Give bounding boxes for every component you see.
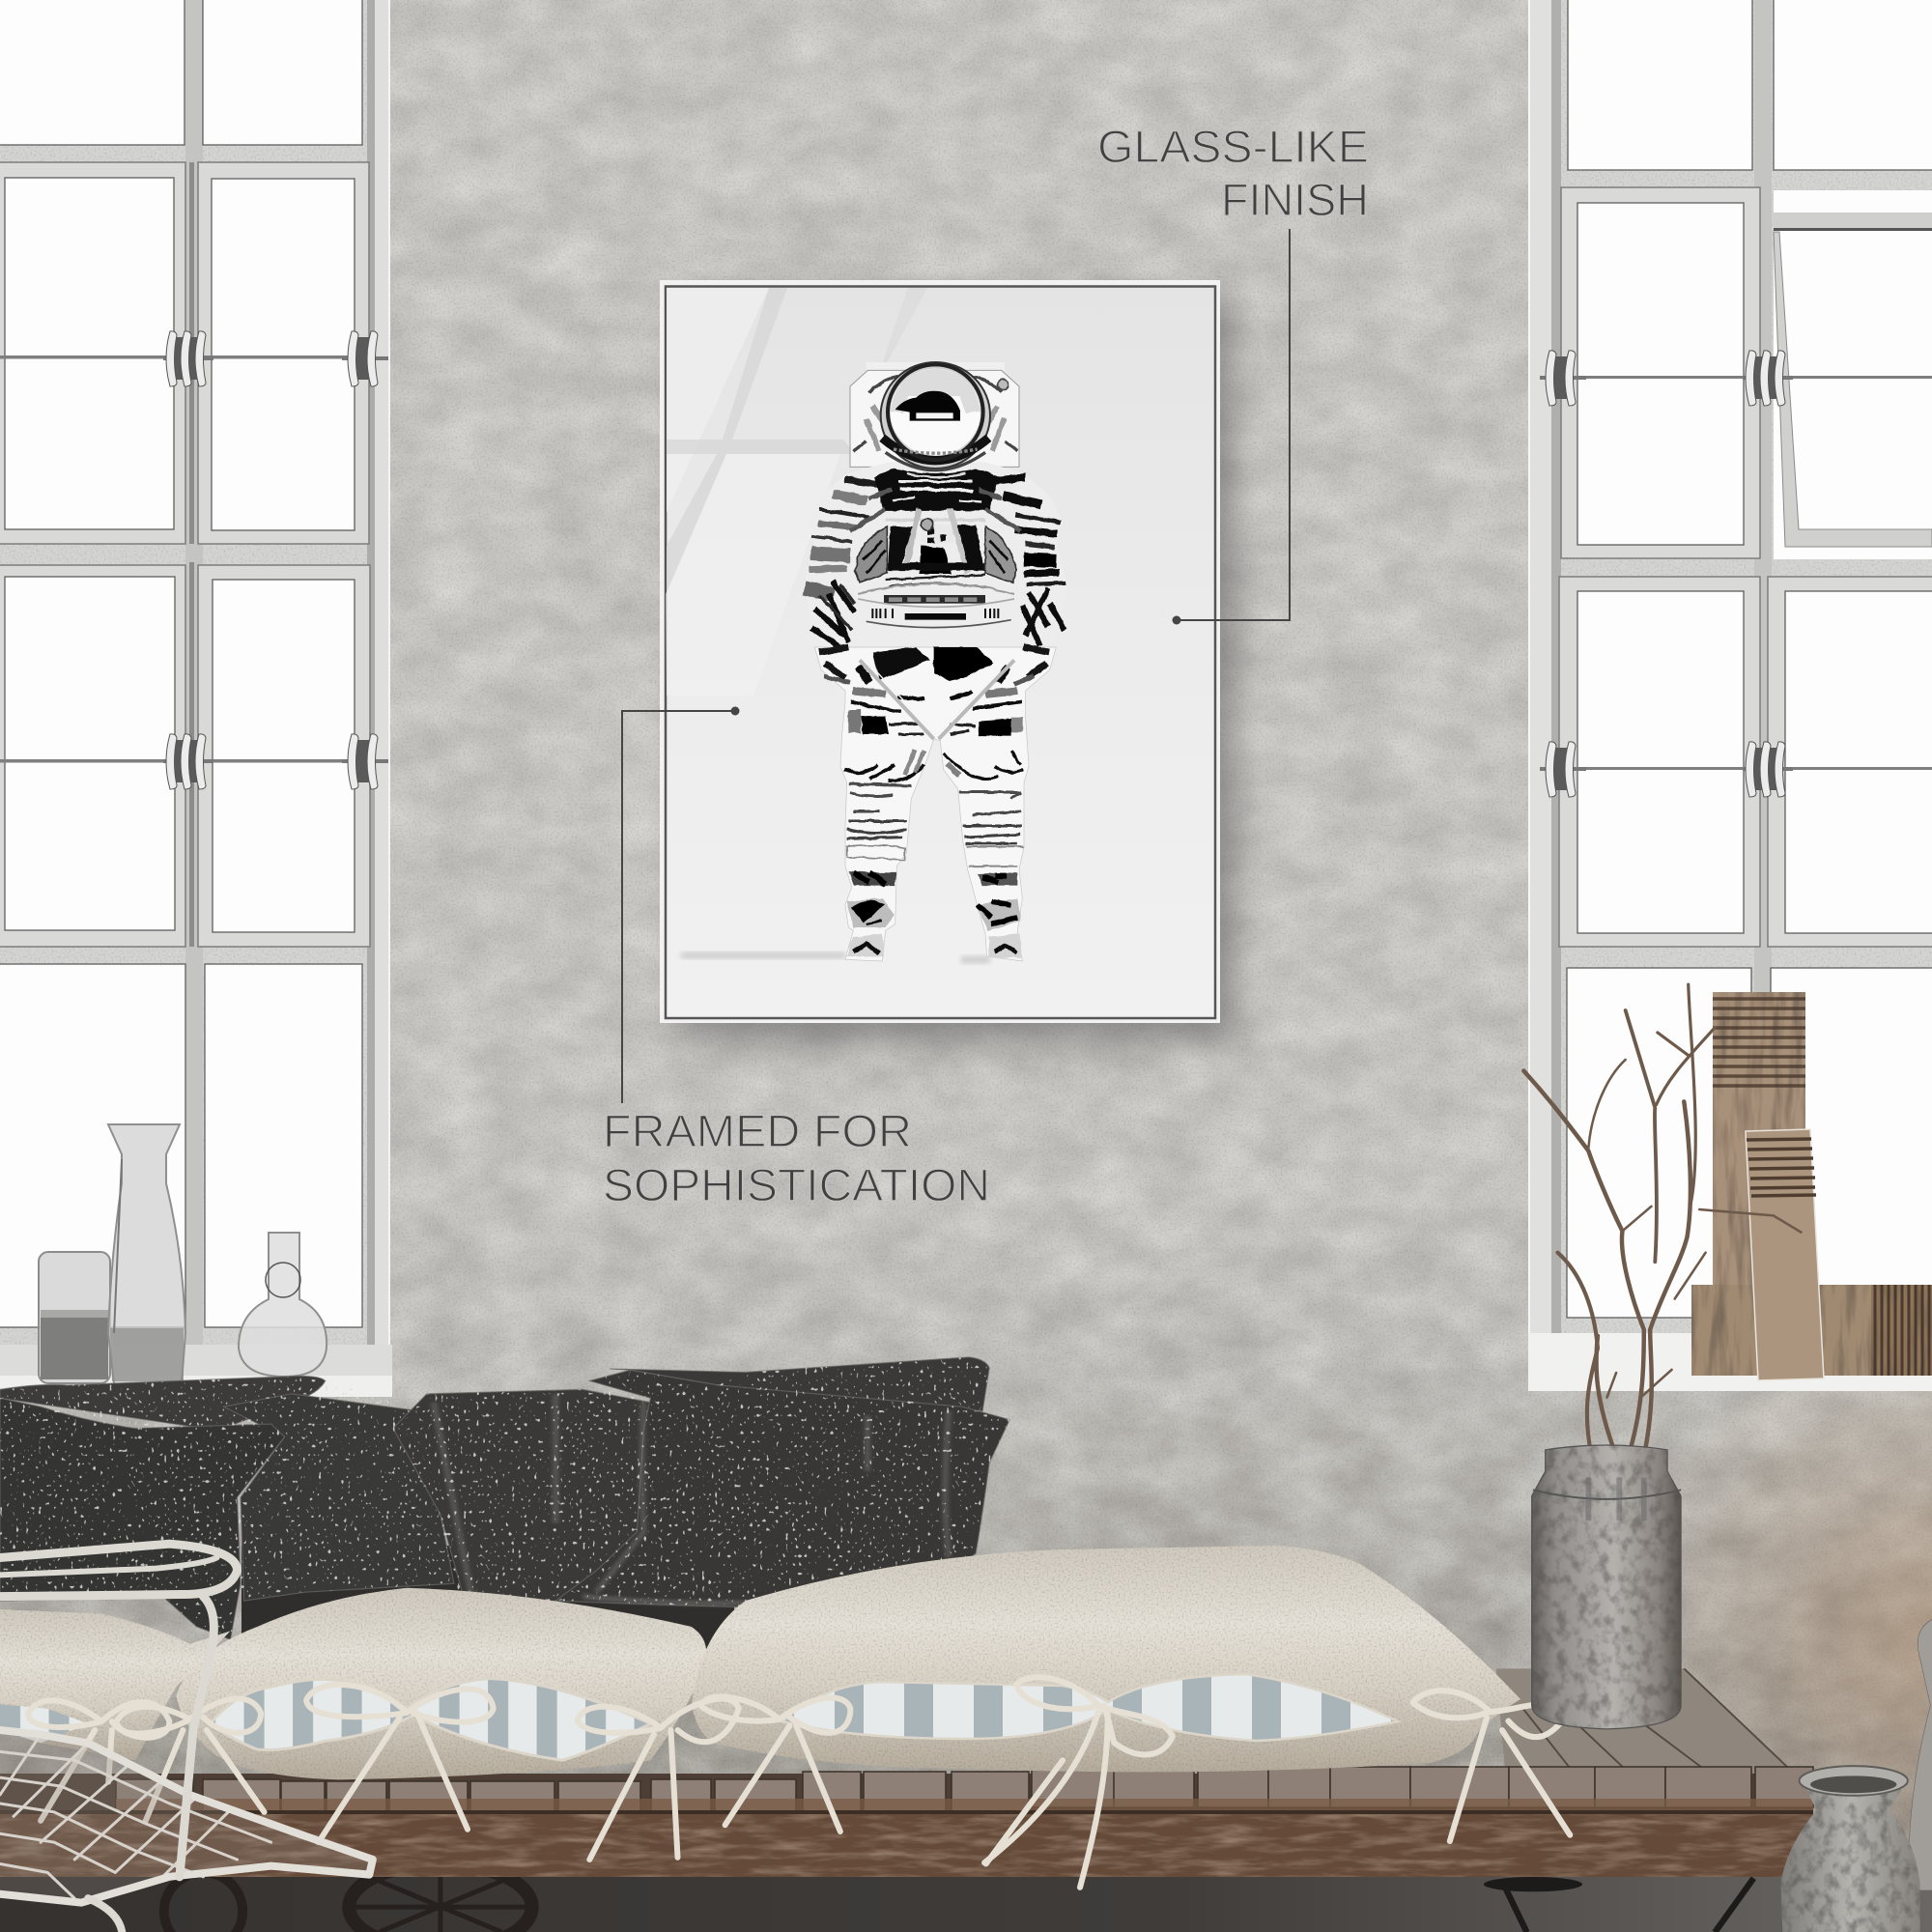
bench and cushions [0,984,1932,1932]
wooden tiles on sill [1691,992,1932,1380]
tile grain [1691,992,1932,1378]
pot patina [1781,1789,1920,1932]
chest panel [886,515,985,525]
chair wire basket [0,1730,373,1903]
pillow: large right [555,1370,1009,1607]
striped linings [0,1674,1398,1760]
pillow backing [242,1546,734,1681]
small pot [1780,1779,1920,1932]
thigh bands [848,710,862,732]
pot rim [1800,1766,1908,1796]
pillow: second left [223,1394,454,1601]
chair rail and leg [0,1544,238,1932]
cushion: centre [176,1588,706,1779]
pillow: middle folded [393,1389,650,1614]
cushion fabric weave [0,1546,1526,1777]
bench deck [1496,1668,1813,1807]
harness straps [860,660,1014,739]
astronaut upper body [804,362,1067,647]
leader dot [1173,616,1180,624]
legs silhouette [814,647,1056,961]
left window [0,0,392,1397]
carafe [108,1124,185,1389]
glass bottles on sill [39,1124,327,1389]
open window sash [1774,190,1932,559]
label: framed for sophistication: FRAMED FOR [603,1105,912,1156]
glass reflection [666,288,927,696]
astronaut [804,362,1067,961]
ribbon bows [28,1677,1570,1888]
helmet [881,362,990,469]
artwork background [666,286,1215,1018]
floor shadows [681,952,990,963]
label: glass-like finish [1097,121,1369,225]
jar [39,1252,110,1383]
framed artwork [660,280,1236,1043]
boot tops [847,898,895,927]
pillow fold sheen [434,1394,949,1609]
pillow: back right [610,1357,989,1411]
tall tile [1713,992,1805,1292]
clay pots, lower right [1777,1619,1932,1932]
leader line [622,711,735,1103]
right window [1528,0,1932,1391]
label: framed for sophistication [603,1105,990,1210]
cushion: right [692,1546,1520,1772]
boots [847,934,884,956]
label: framed for sophistication: SOPHISTICATION [603,1159,990,1210]
label: glass-like finish: GLASS-LIKE [1097,121,1369,172]
front beam [0,1810,1813,1877]
cushion: far left [0,1609,231,1760]
backpack [867,362,1005,370]
waistband [850,702,1022,712]
backpack details [853,377,1017,451]
branches in vase [1523,984,1801,1456]
leaning tile [1746,1129,1824,1380]
glass vase [1531,1444,1682,1730]
tall pot [1909,1619,1932,1890]
left arm bands [845,480,881,485]
neck and chest [874,469,998,510]
thigh folds [845,765,924,781]
visor [895,391,960,421]
base tile [1691,1285,1932,1376]
chest side chrome [855,526,887,582]
floor [0,1877,1932,1932]
front slats [0,1767,1813,1812]
waist [886,575,985,587]
knee folds [848,784,911,811]
frame shadow [681,295,1236,1043]
hip chrome [872,647,930,679]
pillow speckles [0,1358,1010,1634]
suit silhouette [804,462,1067,647]
callout: glass-like finish [1097,121,1369,624]
pillow: front left [0,1398,285,1639]
callout: framed for sophistication [603,707,990,1210]
shin band [847,845,905,860]
round bottle [239,1233,327,1377]
astronaut legs [814,647,1056,961]
bench legs and wheels [164,1863,1753,1932]
dark pillows [0,1356,1010,1650]
right arm bands [990,477,1026,481]
white frame [660,280,1220,1023]
pillow: back left [0,1376,326,1429]
pot opening [1810,1776,1896,1793]
leader line [1177,229,1290,620]
leader dot [730,707,740,715]
label: glass-like finish: FINISH [1221,174,1369,225]
wire chair [0,1544,373,1932]
